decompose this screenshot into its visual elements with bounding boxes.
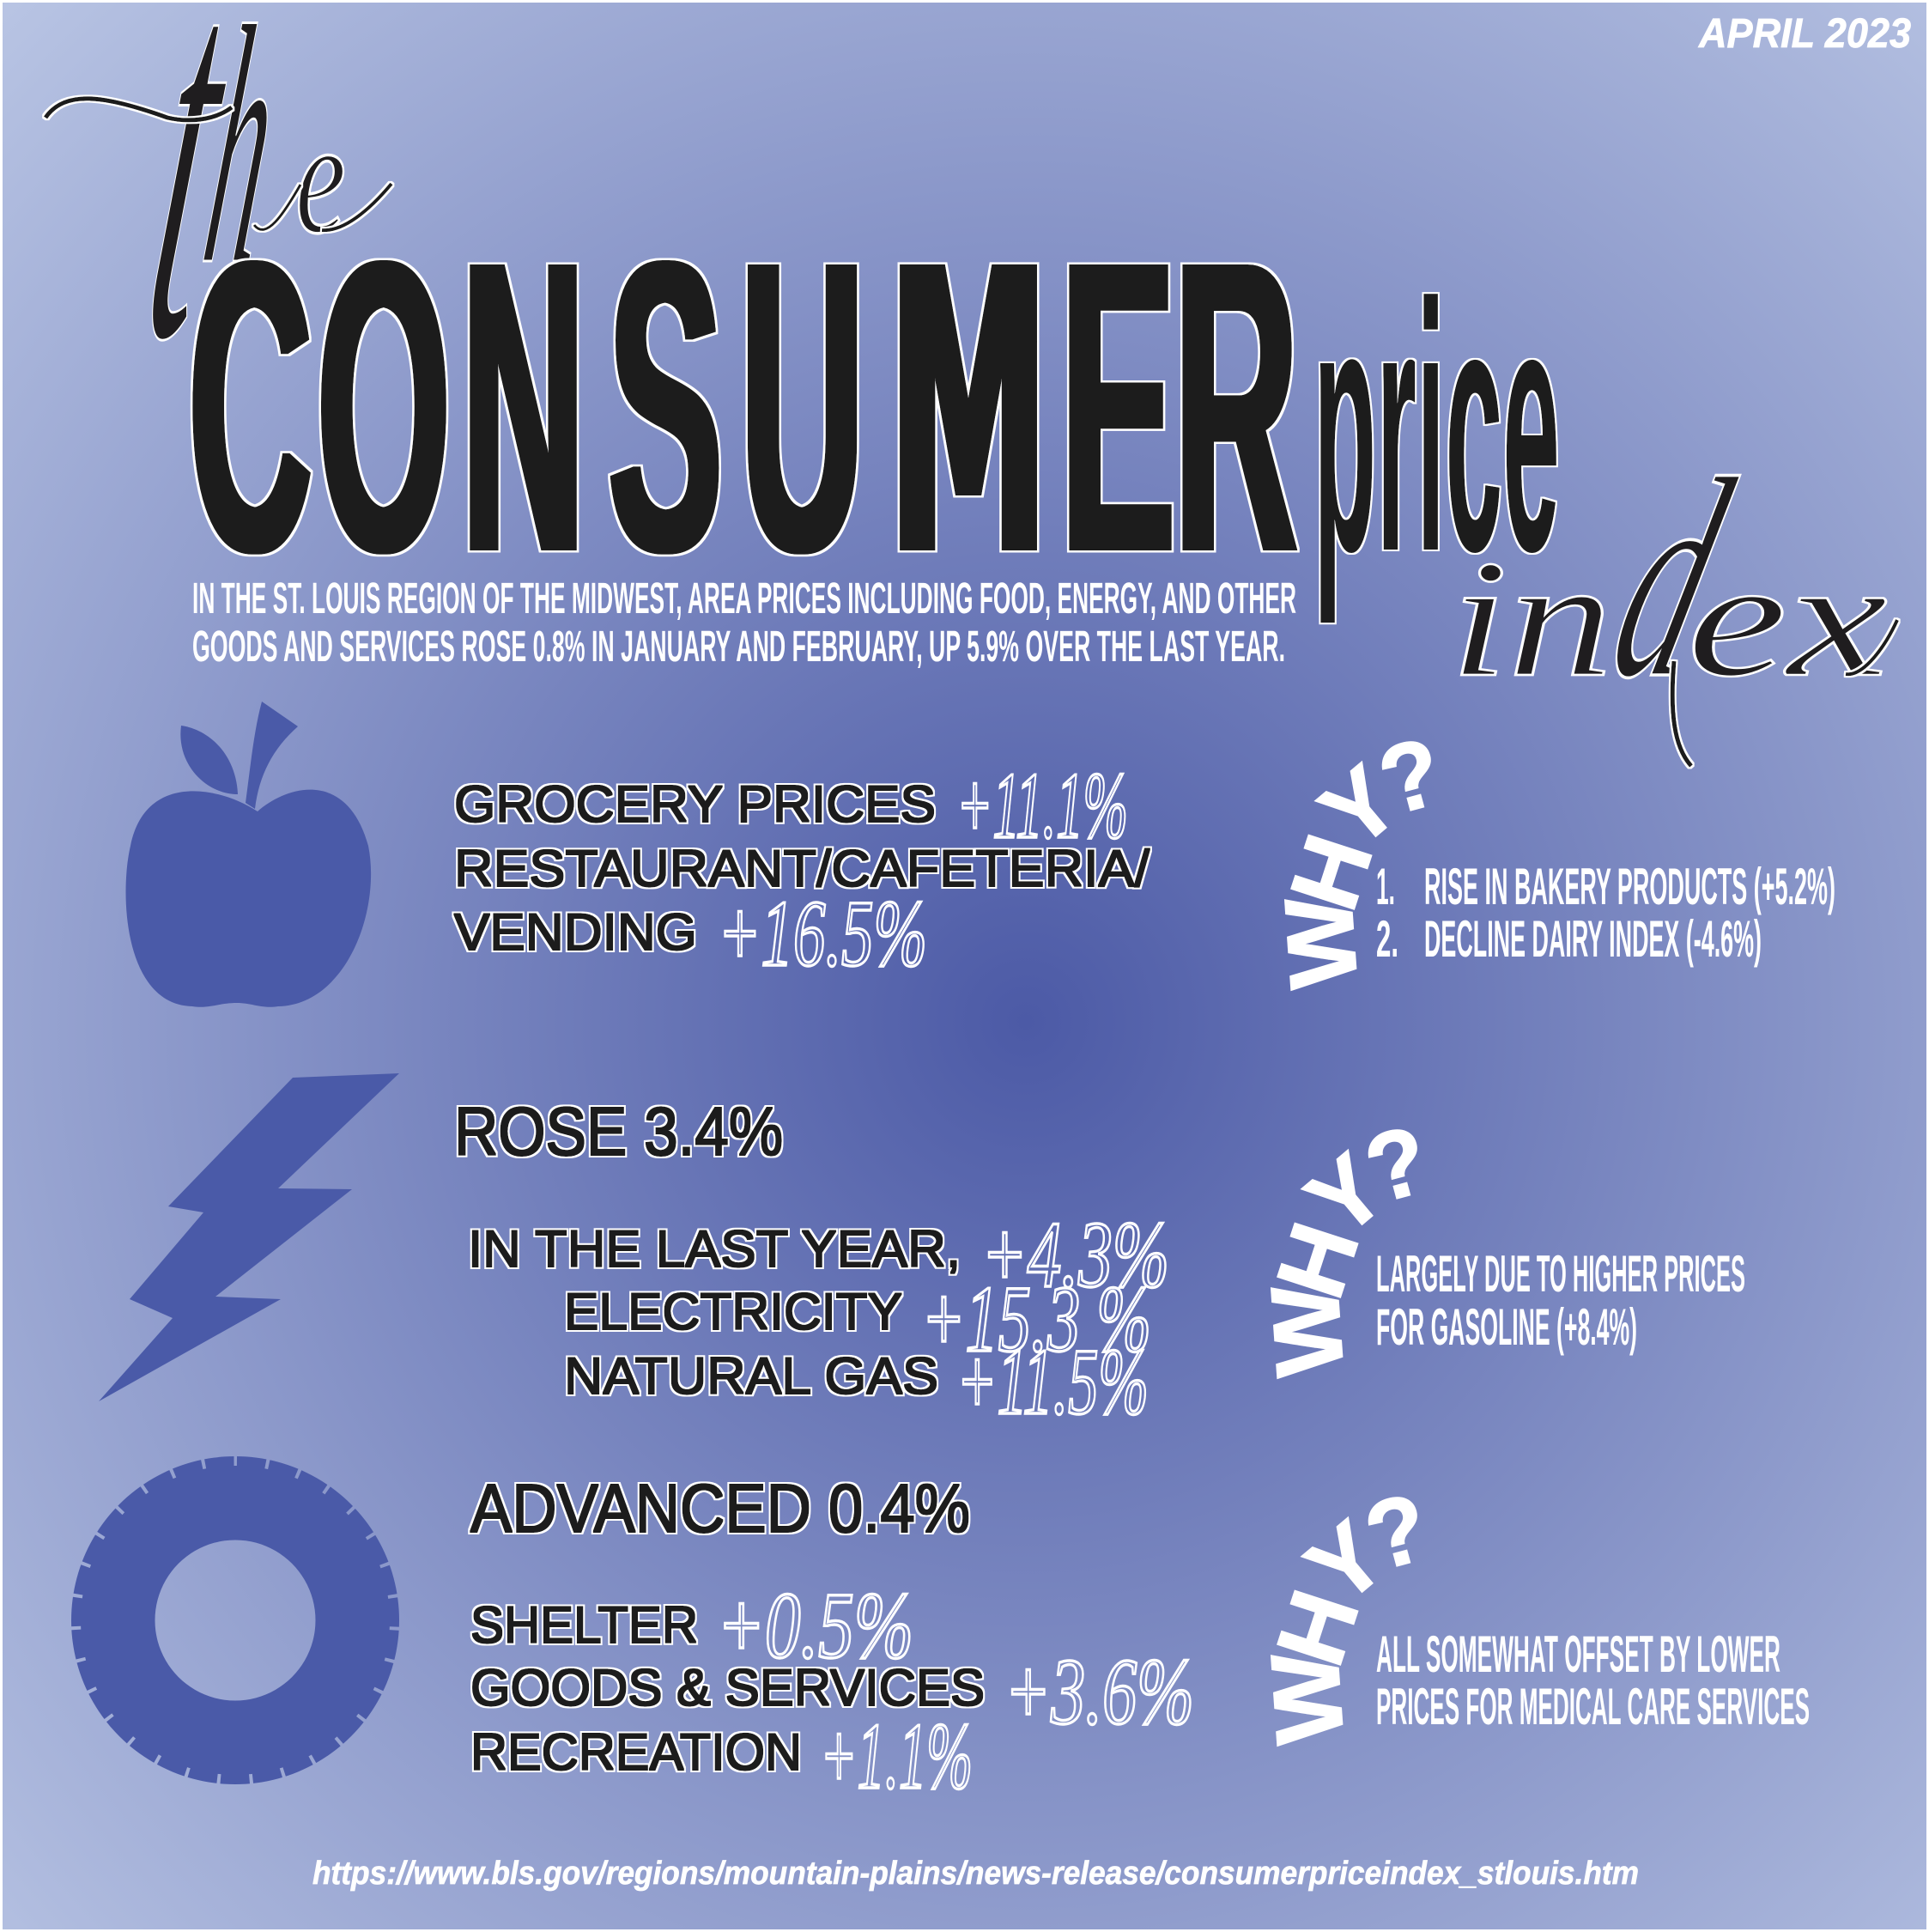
other goods percentages: +0.5%: [717, 1573, 913, 1678]
date label: APRIL 2023: [1698, 11, 1911, 57]
energy percentages: [921, 1202, 1169, 1434]
why explanation: [1376, 1625, 1810, 1735]
title word: index: d: [1586, 420, 1758, 738]
other goods statistics: SHELTER: [470, 1596, 698, 1654]
title word: the: e: [295, 88, 346, 268]
other goods percentages: +3.6%: [1004, 1639, 1194, 1744]
title word: CONSUMER: ER: [1061, 175, 1297, 639]
energy statistics: [454, 1093, 961, 1405]
food percentages: +16.5%: [718, 881, 927, 986]
panel: other goods: [71, 1456, 1810, 1808]
food statistics: VENDING: [454, 903, 697, 961]
icon: lightning bolt: [99, 1073, 399, 1401]
why label: WHY?: [1265, 717, 1453, 992]
why explanation: [1376, 1245, 1745, 1356]
energy statistics: ROSE 3.4%: [454, 1093, 783, 1170]
other goods percentages: +1.1%: [820, 1704, 973, 1808]
energy percentages: +11.5%: [956, 1329, 1149, 1434]
energy percentages: +15.3 %: [921, 1267, 1151, 1371]
icon: tire: [71, 1456, 399, 1784]
other goods statistics: GOODS & SERVICES: [470, 1659, 985, 1716]
why list: 2.: [1376, 910, 1398, 968]
other goods statistics: RECREATION: [470, 1723, 802, 1781]
why label: WHY?: [1251, 1473, 1439, 1747]
energy statistics: IN THE LAST YEAR,: [468, 1220, 961, 1278]
title word: index: [1450, 420, 1897, 766]
food statistics: RESTAURANT/CAFETERIA/: [454, 840, 1150, 897]
energy percentages: +4.3%: [981, 1202, 1169, 1307]
panel: energy: [99, 1073, 1745, 1434]
intro text: [192, 574, 1296, 671]
other goods percentages: [717, 1573, 1194, 1808]
panel: food: [126, 702, 1835, 1007]
title word: index: in: [1450, 526, 1613, 711]
other goods statistics: ADVANCED 0.4%: [470, 1470, 970, 1546]
food percentages: +11.1%: [956, 753, 1128, 858]
title: [45, 0, 1897, 766]
energy statistics: ELECTRICITY: [564, 1283, 902, 1340]
title word: CONSUMER: M: [889, 187, 1048, 644]
energy statistics: NATURAL GAS: [564, 1347, 938, 1405]
why list: 1.: [1376, 858, 1395, 915]
why list: [1376, 858, 1835, 968]
other goods statistics: [470, 1470, 985, 1781]
title word: CONSUMER: CONSU: [189, 175, 864, 639]
food percentages: [718, 753, 1128, 986]
title word: index: ex: [1687, 526, 1888, 712]
source url: https://www.bls.gov/regions/mountain-plains/news-release/consumerpriceindex_stlouis.htm: [312, 1856, 1639, 1892]
food statistics: GROCERY PRICES: [454, 775, 936, 833]
title word: the: [45, 0, 391, 454]
why label: WHY?: [1251, 1105, 1439, 1380]
food statistics: [454, 775, 1150, 961]
title word: CONSUMER: [189, 175, 1297, 644]
icon: apple: [126, 702, 371, 1007]
